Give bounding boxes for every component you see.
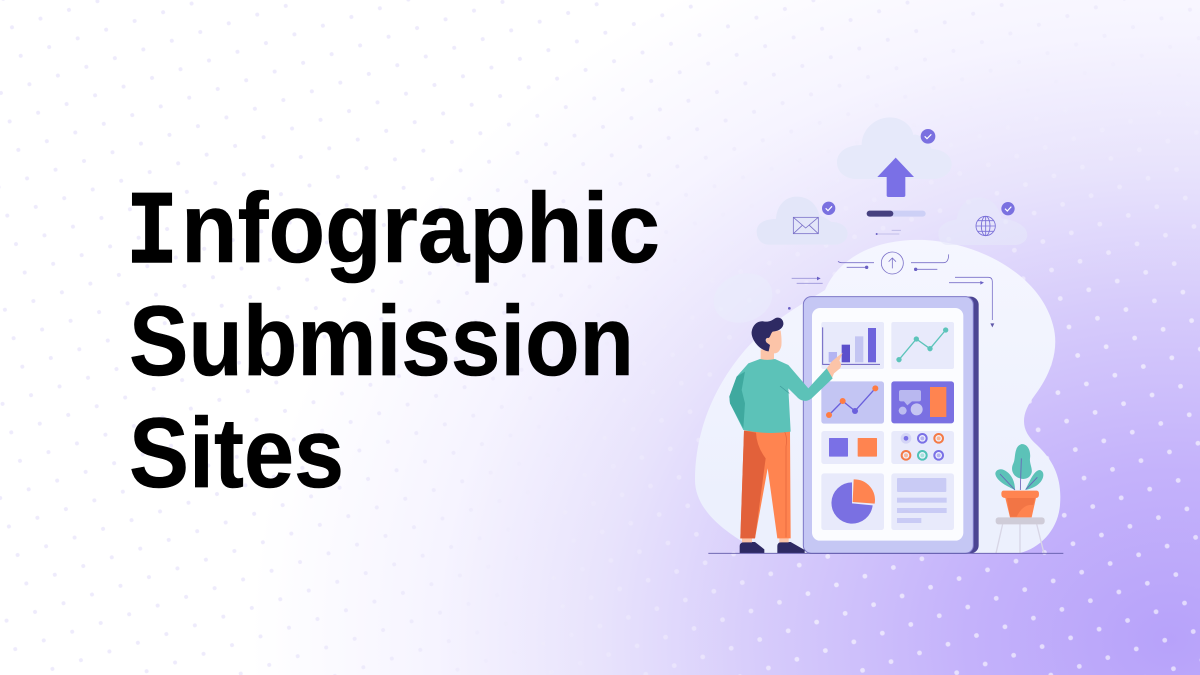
title: I: [126, 176, 178, 294]
arrow heads: [788, 233, 984, 310]
plant on stool: [995, 444, 1045, 553]
title: Sites: [129, 397, 344, 508]
trousers: [740, 431, 791, 538]
card: purple dashboard: [891, 381, 954, 423]
card: bar chart: [821, 322, 884, 369]
hand: [826, 353, 843, 378]
illustration: upper section (clouds and connectors): [757, 117, 1027, 320]
hair: [752, 318, 783, 351]
illustration: tablet and person: [708, 297, 1063, 553]
title: nfographic: [181, 172, 660, 283]
cloud: upload: [837, 117, 952, 197]
title: Submission: [129, 285, 634, 396]
card: squares: [821, 431, 884, 464]
icon: upload circle: [881, 252, 903, 274]
icon: check badge: [822, 202, 835, 215]
ankles: [742, 537, 789, 542]
tablet: [803, 297, 994, 553]
card: text lines: [891, 473, 954, 530]
pot: [1001, 491, 1039, 517]
card: orange line chart: [821, 381, 884, 424]
ground line: [708, 552, 1063, 555]
icon: envelope: [793, 217, 818, 234]
card: pie chart: [821, 473, 884, 530]
connector arrow tip: [990, 323, 994, 327]
illustration: pale cloud behind tablet: [707, 265, 779, 331]
card: ring dots: [891, 431, 954, 464]
person: [729, 318, 843, 553]
sweater: [729, 359, 833, 433]
stool: [996, 517, 1045, 553]
icon: globe: [976, 216, 995, 236]
shoes: [740, 542, 805, 553]
connector lines: [792, 230, 992, 320]
illustration: background blob: [695, 240, 1060, 553]
neck and face: [761, 331, 782, 360]
cloud: mail: [757, 197, 848, 245]
title: [126, 172, 660, 508]
leaves: [995, 444, 1043, 490]
icon: upload arrow: [877, 158, 914, 197]
icon: check badge: [921, 129, 935, 144]
progress bar: [867, 211, 926, 217]
cloud: globe: [938, 197, 1027, 245]
icon: check badge: [1001, 202, 1015, 215]
card: teal line chart: [891, 322, 954, 369]
